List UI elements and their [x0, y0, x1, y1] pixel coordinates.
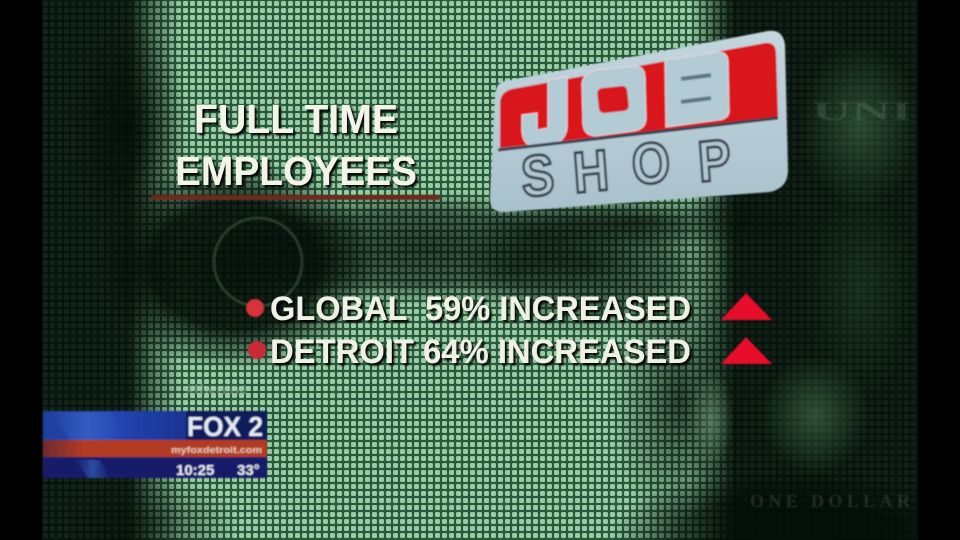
bug time and temperature: 10:25 — [176, 462, 214, 479]
row: Global: GLOBAL 59% INCREASED — [270, 290, 691, 328]
logo SHOP text: SHOP — [519, 127, 733, 210]
banknote lettering: UNI — [812, 97, 912, 126]
bug URL: myfoxdetroit.com — [171, 445, 262, 456]
banknote lettering: ONE DOLLAR — [750, 491, 911, 511]
list: job increases — [246, 290, 772, 371]
row: Detroit: DETROIT 64% INCREASED — [270, 333, 691, 371]
bug background — [43, 411, 267, 478]
logo plate — [490, 31, 788, 212]
station bug: Fox 2 — [43, 411, 267, 479]
logo band shadow line — [498, 118, 778, 150]
banknote lettering — [750, 97, 912, 511]
logo O counter — [597, 85, 629, 113]
heading underline — [152, 195, 440, 200]
heading: Full Time Employees: EMPLOYEES — [175, 148, 417, 194]
logo: Job Shop — [490, 31, 788, 212]
logo JOB letters — [522, 52, 729, 146]
bug Fox 2 logo: FOX 2 — [187, 411, 263, 442]
station bug: Fox 2: 33° — [237, 462, 260, 479]
logo red band — [500, 43, 778, 148]
heading: Full Time Employees: FULL TIME — [194, 96, 398, 142]
bug streaks — [50, 412, 125, 478]
portrait ring — [214, 218, 302, 306]
logo B slots — [681, 73, 711, 104]
hashtag: #thenine — [186, 381, 248, 398]
heading: Full Time Employees — [175, 96, 417, 194]
